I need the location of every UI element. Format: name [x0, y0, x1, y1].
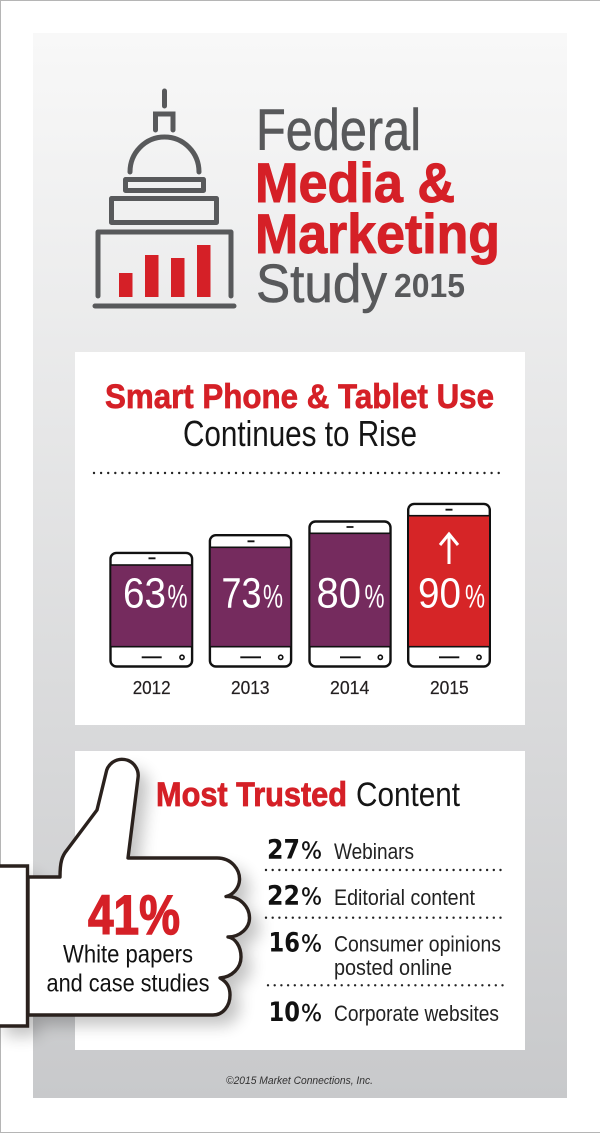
icon: up arrow [440, 534, 458, 564]
list item: webinars [267, 834, 414, 865]
title: Federal [256, 98, 421, 163]
panel: most trusted content [75, 751, 525, 1050]
heading: most trusted content: Content [356, 776, 460, 814]
list item: corporate websites: 10 [268, 997, 300, 1028]
list item: consumer opinions posted online: 16 [268, 928, 300, 958]
callout label: white papers and case studies [46, 941, 210, 998]
icon: thumbs up callout [0, 759, 260, 1036]
title: Media & [255, 151, 455, 214]
phone chart 2014: 80%: 80 [316, 569, 361, 617]
heading: smart phone and tablet use: Continues to Rise [183, 413, 417, 454]
title: Marketing [255, 202, 500, 265]
phone chart 2012: 63% [110, 553, 192, 698]
thumb hand [28, 759, 250, 1015]
heading: most trusted content [156, 776, 460, 814]
phone chart 2013: 73%: 73 [222, 569, 262, 617]
phone chart 2014: 80%: 2014 [330, 678, 369, 698]
title [255, 98, 500, 314]
list item: consumer opinions posted online: % [301, 932, 322, 958]
phone chart 2015: 90% [408, 504, 490, 698]
footer copyright: ©2015 Market Connections, Inc. [226, 1075, 373, 1087]
phone chart 2012: 63%: 2012 [133, 678, 171, 698]
heading: smart phone and tablet use: Smart Phone & Tablet Use [105, 378, 494, 416]
heading: smart phone and tablet use [105, 378, 494, 454]
list item: corporate websites: Corporate websites [334, 1001, 499, 1026]
phone chart 2015: 90%: 90 [418, 569, 461, 617]
callout label: white papers and case studies: and case studies [46, 970, 210, 998]
list item: corporate websites [268, 997, 499, 1028]
list item: editorial content: % [301, 884, 322, 910]
list item: corporate websites: % [301, 1001, 322, 1027]
callout label: white papers and case studies: White papers [63, 941, 193, 969]
list item: webinars: 27 [267, 834, 300, 865]
list item: consumer opinions posted online: posted online [334, 955, 452, 980]
phone chart 2012: 63%: 63 [123, 569, 166, 617]
title: 2015 [394, 267, 465, 304]
phone chart 2013: 73% [210, 535, 291, 698]
logo: capitol building icon [95, 91, 234, 306]
list item: consumer opinions posted online [268, 928, 501, 980]
panel: smart phone and tablet use [75, 352, 525, 725]
list item: editorial content: 22 [267, 880, 300, 912]
heading: most trusted content: Most Trusted [156, 776, 347, 814]
phone chart 2012: 63%: % [168, 578, 188, 614]
phone chart 2014: 80% [310, 522, 390, 698]
list item: editorial content: Editorial content [334, 885, 475, 910]
callout figure: 41%: 41% [88, 883, 180, 946]
phone chart 2015: 90%: % [465, 578, 485, 614]
list item: webinars: % [301, 838, 322, 864]
list item: consumer opinions posted online: Consumer opinions [334, 932, 501, 957]
phone chart 2015: 90%: 2015 [430, 678, 469, 698]
list item: editorial content [267, 880, 475, 912]
title: Study [256, 254, 387, 314]
phone chart 2013: 73%: % [263, 578, 283, 614]
phone chart 2014: 80%: % [364, 578, 384, 614]
list item: webinars: Webinars [334, 839, 414, 864]
thumb cuff [0, 866, 28, 1026]
phone chart 2013: 73%: 2013 [231, 678, 270, 698]
